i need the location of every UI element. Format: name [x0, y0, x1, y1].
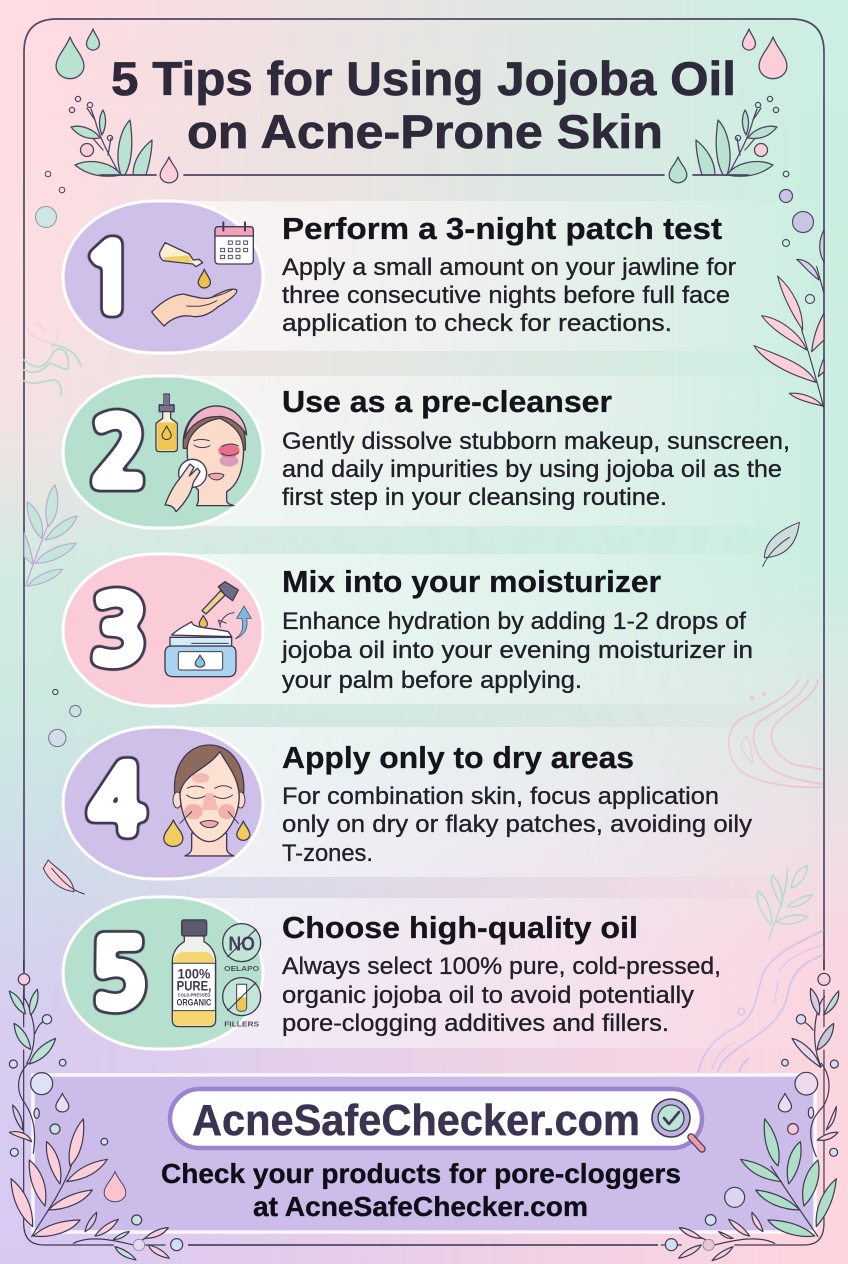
description 5: pore-clogging additives and fillers.: [282, 1010, 669, 1037]
icon: woman cleansing with cotton pad and dropper bottle: [156, 394, 247, 512]
number badge 5: [63, 897, 263, 1049]
description 2: and daily impurities by using jojoba oil as the: [282, 456, 782, 483]
description 1: three consecutive nights before full face: [282, 282, 730, 309]
title divider with drops: [100, 157, 748, 183]
description 2: Gently dissolve stubborn makeup, sunscreen,: [282, 428, 790, 455]
panel: tip 2: [63, 376, 824, 528]
panel: tip 1: [63, 201, 824, 353]
decoration: left lavender leaf branch: [24, 485, 77, 587]
decoration: bubbles top right: [780, 171, 814, 304]
number badge 1: [63, 201, 263, 353]
icon: organic oil bottle with no-additive badges: [172, 920, 261, 1028]
number 5: 5: [91, 930, 147, 1021]
number 4: 4: [89, 756, 145, 847]
heading 2: Use as a pre-cleanser: [282, 384, 612, 419]
decoration: top-right drops: [742, 29, 787, 79]
heading 3: Mix into your moisturizer: [282, 564, 661, 599]
row band 1: [190, 201, 824, 351]
number badge 4: [63, 727, 263, 879]
description 5: [282, 953, 721, 1037]
row band 4: [190, 727, 824, 877]
description 5: Always select 100% pure, cold-pressed,: [282, 953, 721, 980]
number badge 2: [63, 376, 263, 528]
decoration: bottom-left floral corner: [9, 960, 183, 1260]
icon: organic oil bottle with no-additive badges: OELAPO: [224, 964, 259, 973]
decoration: top-left drops: [56, 29, 100, 79]
decoration: right pink branch: [754, 230, 824, 408]
description 4: only on dry or flaky patches, avoiding oily: [282, 811, 753, 838]
number badge 3: [63, 554, 263, 706]
icon: organic oil bottle with no-additive badges: 100%: [178, 965, 211, 981]
heading 4: Apply only to dry areas: [282, 740, 634, 775]
description 4: For combination skin, focus application: [282, 783, 719, 810]
description 3: [281, 608, 753, 694]
decoration: title right sprig: [696, 96, 779, 176]
title: 5 Tips for Using Jojoba Oil: [111, 52, 736, 105]
title: on Acne-Prone Skin: [187, 105, 663, 158]
description 3: Enhance hydration by adding 1-2 drops of: [282, 608, 746, 635]
icon: organic oil bottle with no-additive badges: COLD-PRESSED: [178, 992, 211, 997]
description 4: T-zones.: [282, 840, 373, 867]
decoration: pink swirl right: [729, 680, 822, 787]
icon: oil dropping into hand with calendar: [152, 222, 253, 326]
search pill: [170, 1089, 702, 1148]
website name: AcneSafeChecker.com: [192, 1096, 640, 1145]
row band 3: [190, 554, 824, 704]
decoration: lavender swirl right: [698, 931, 823, 1072]
description 5: organic jojoba oil to avoid potentially: [282, 982, 695, 1009]
decoration: mint sprig right: [757, 866, 812, 940]
icon: dropper over moisturizer jar: [165, 582, 251, 677]
decoration: small leaf right: [763, 522, 799, 567]
decoration: bubbles top left: [36, 171, 65, 228]
panel: tip 4: [63, 727, 824, 879]
panel: call to action banner: [33, 1075, 815, 1232]
heading 1: Perform a 3-night patch test: [282, 211, 722, 246]
icon: magnifying glass with check: [652, 1099, 702, 1149]
number 3: 3: [91, 586, 147, 677]
icon: face with dry patches and oil drops: [164, 745, 250, 856]
decoration: bubbles left middle: [49, 689, 81, 747]
decoration: title left sprig: [69, 96, 152, 176]
decoration: left mint swirl: [24, 322, 81, 395]
description 3: jojoba oil into your evening moisturizer in: [281, 637, 753, 664]
number 1: 1: [82, 234, 138, 325]
call to action text: [161, 1158, 681, 1222]
panel: tip 3: [63, 554, 824, 706]
description 4: [282, 783, 753, 867]
row band 2: [190, 376, 824, 526]
icon: organic oil bottle with no-additive badges: PURE,: [177, 977, 211, 993]
decoration: bottom-right floral corner: [661, 960, 839, 1261]
row band 5: [190, 898, 824, 1048]
banner background: [33, 1075, 815, 1232]
icon: organic oil bottle with no-additive badges: FILLERS: [224, 1019, 259, 1028]
icon: organic oil bottle with no-additive badges: NO: [228, 933, 255, 956]
decoration: pink leaf left: [43, 860, 84, 894]
number 2: 2: [91, 408, 147, 499]
description 3: your palm before applying.: [282, 667, 582, 694]
description 1: application to check for reactions.: [282, 310, 672, 337]
panel: tip 5: [63, 897, 824, 1049]
description 1: [282, 254, 736, 337]
description 2: [282, 428, 790, 511]
description 1: Apply a small amount on your jawline for: [282, 254, 736, 281]
heading 5: Choose high-quality oil: [282, 910, 638, 945]
description 2: first step in your cleansing routine.: [282, 484, 667, 511]
call to action text: Check your products for pore-cloggers: [161, 1158, 681, 1189]
icon: organic oil bottle with no-additive badges: ORGANIC: [177, 997, 212, 1007]
call to action text: at AcneSafeChecker.com: [253, 1191, 588, 1222]
title: [111, 52, 736, 158]
